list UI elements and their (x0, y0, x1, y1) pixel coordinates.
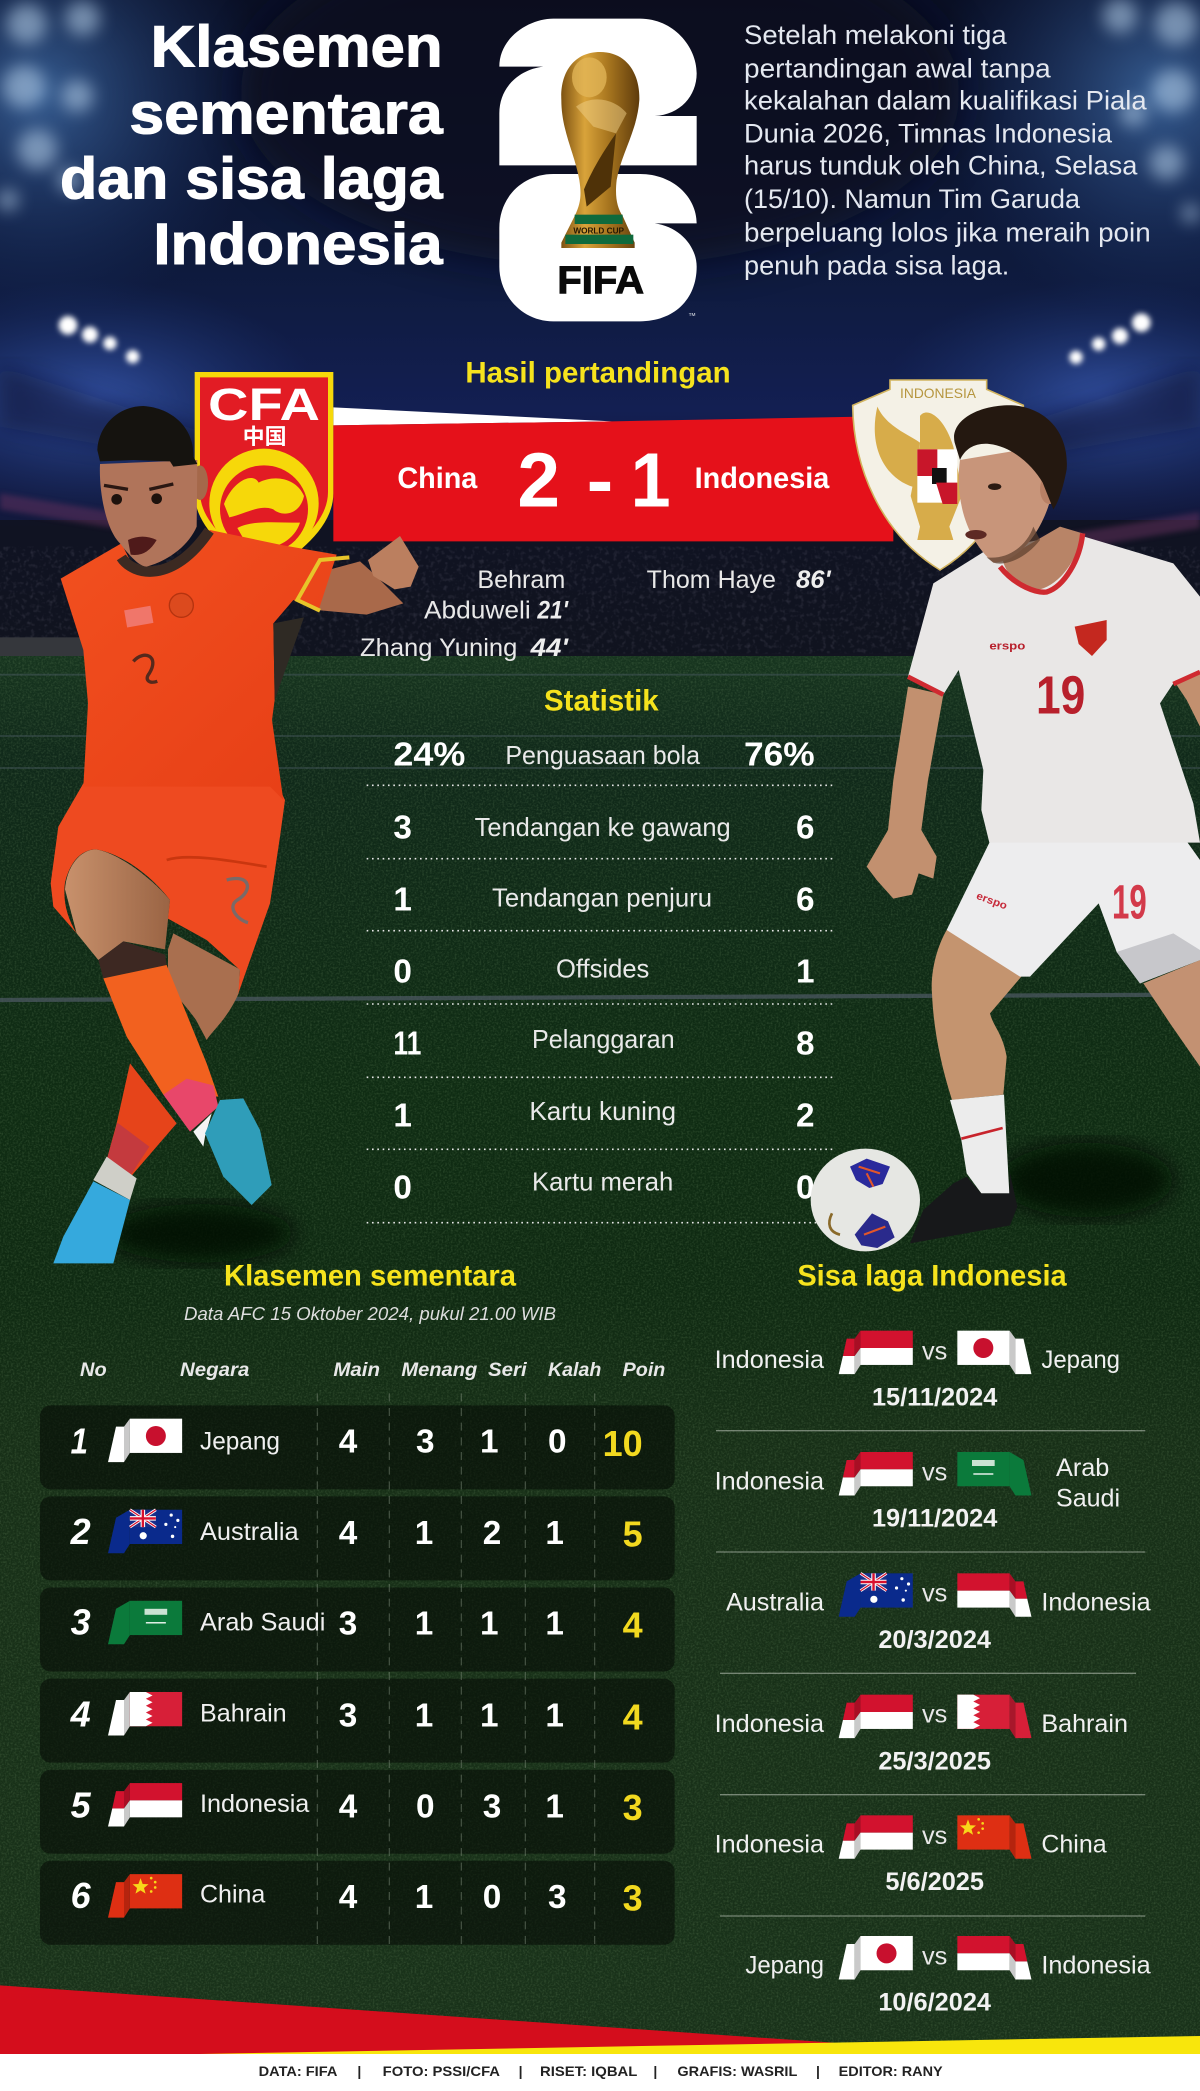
row: Arab Saudi: 3 (71, 1602, 91, 1643)
badge: CFA China: 中国 (243, 425, 287, 449)
row: Bahrain: Bahrain (200, 1699, 287, 1727)
stat: corners: 1 (393, 882, 412, 919)
heading: standings: Klasemen sementara (224, 1259, 517, 1292)
stat: fouls: 11 (393, 1026, 421, 1063)
stat: yellow cards: Kartu kuning (529, 1096, 676, 1126)
match: Australia vs Indonesia: Indonesia (1041, 1589, 1152, 1617)
stat: fouls (393, 1024, 815, 1063)
white jersey (908, 533, 1200, 843)
match: Indonesia vs Bahrain: vs (922, 1701, 947, 1729)
footer: credits: EDITOR: RANY (839, 2063, 943, 2079)
row: Indonesia: 5 (71, 1784, 92, 1825)
match: Indonesia vs Arab Saudi: 19/11/2024 (872, 1505, 997, 1533)
match: Jepang vs Indonesia (745, 1936, 1152, 2017)
stat: offsides: 1 (796, 954, 815, 991)
row: Australia (70, 1510, 643, 1555)
title (60, 15, 443, 277)
white shorts (947, 837, 1200, 983)
table header: Kalah (548, 1360, 601, 1381)
stat: shots on goal: 3 (393, 810, 412, 847)
match: Indonesia vs China (715, 1815, 1108, 1896)
background: night stadium sky (0, 0, 1200, 660)
row: China: 0 (483, 1879, 501, 1916)
row: Jepang: 0 (548, 1424, 567, 1461)
stat: shots on goal: Tendangan ke gawang (475, 812, 731, 842)
score: 1 (631, 438, 671, 524)
row: Arab Saudi (71, 1601, 643, 1645)
trophy (561, 52, 639, 248)
row: Bahrain: 4 (623, 1696, 643, 1737)
match: Indonesia vs Jepang: vs (922, 1337, 947, 1365)
score: 2 (517, 438, 560, 524)
heading: statistics: Statistik (544, 685, 659, 718)
footer: credits: | (653, 2063, 657, 2079)
hair (97, 406, 197, 467)
row: Australia: 4 (339, 1515, 358, 1552)
match: Australia vs Indonesia: vs (922, 1579, 947, 1607)
goal scorers: Thom Haye (647, 566, 776, 594)
match: Indonesia vs China: 5/6/2025 (885, 1868, 984, 1896)
teal boot (205, 1098, 272, 1205)
row: China: China (200, 1881, 266, 1909)
numeral 6 (499, 174, 697, 321)
row: China: 3 (548, 1879, 567, 1916)
row: China: 3 (623, 1878, 643, 1919)
footer: credits: | (816, 2063, 820, 2079)
jersey number: 19 (1036, 666, 1085, 725)
row: Arab Saudi: 4 (623, 1604, 643, 1645)
grey ankle (93, 1157, 137, 1200)
FIFA wordmark: FIFA (557, 259, 644, 302)
player: China footballer (51, 406, 419, 1263)
front thigh (65, 849, 170, 960)
row: Indonesia: 0 (416, 1788, 435, 1825)
match: Australia vs Indonesia: 20/3/2024 (878, 1626, 991, 1654)
blue boot (53, 1181, 130, 1263)
jersey details (124, 593, 248, 923)
row: Arab Saudi: 1 (480, 1606, 499, 1643)
match: Indonesia vs Jepang: 15/11/2024 (872, 1383, 997, 1411)
match: Indonesia vs Bahrain: 25/3/2025 (878, 1747, 991, 1775)
stat: yellow cards: 1 (393, 1098, 412, 1135)
intro text: Dunia 2026, Timnas Indonesia (744, 119, 1112, 149)
stat: fouls: 8 (796, 1026, 815, 1063)
row: Indonesia: Indonesia (200, 1790, 310, 1818)
match: Indonesia vs Arab Saudi: Saudi (1056, 1485, 1120, 1513)
stat: offsides: Offsides (556, 953, 649, 983)
row: Australia: Australia (200, 1518, 300, 1546)
numeral 2 (499, 19, 697, 165)
score: - (587, 438, 613, 524)
row: China (71, 1874, 643, 1919)
intro text (744, 20, 1151, 281)
match: Jepang vs Indonesia: 10/6/2024 (878, 1989, 991, 2017)
pink toe (163, 1079, 218, 1132)
stat: fouls: Pelanggaran (532, 1024, 675, 1054)
row: Bahrain: 4 (70, 1694, 91, 1735)
stat: corners: 6 (796, 882, 815, 919)
trademark: ™ (688, 312, 696, 321)
armband (297, 557, 349, 611)
stat: ball possession: 76% (744, 736, 815, 773)
row: Indonesia: 3 (483, 1788, 501, 1825)
team: China: China (397, 462, 478, 495)
goal scorers: 21' (536, 597, 569, 625)
collar (121, 531, 209, 571)
table header (80, 1360, 665, 1381)
footer: credits: | (357, 2063, 361, 2079)
footer: credits: FOTO: PSSI/CFA (383, 2063, 500, 2079)
badge: CFA China (195, 372, 333, 576)
neck (1003, 527, 1083, 589)
match: Indonesia vs China: Indonesia (715, 1831, 825, 1859)
goal scorers: Behram (477, 566, 565, 594)
stat: yellow cards: 2 (796, 1098, 815, 1135)
match: Indonesia vs Bahrain: Indonesia (715, 1710, 825, 1738)
row: China: 1 (415, 1879, 433, 1916)
ear (1040, 475, 1059, 504)
heading: remaining matches: Sisa laga Indonesia (797, 1259, 1067, 1292)
row: Jepang: 1 (71, 1420, 88, 1461)
table header: No (80, 1360, 107, 1381)
black boot (910, 1173, 1017, 1243)
trophy: WORLD CUP (573, 226, 625, 235)
goal scorers: 86' (796, 566, 832, 594)
white ankle (193, 1113, 212, 1147)
stat: ball possession: Penguasaan bola (505, 740, 701, 770)
stat: shots on goal (393, 810, 815, 847)
intro text: (15/10). Namun Tim Garuda (744, 184, 1080, 214)
footer: credits (0, 2054, 1200, 2091)
row: Jepang: Jepang (200, 1427, 280, 1455)
footer: credits: GRAFIS: WASRIL (677, 2063, 798, 2079)
row: Indonesia: 1 (545, 1788, 564, 1825)
stat: offsides: 0 (393, 954, 412, 991)
eyes and mouth (965, 483, 1040, 564)
football (811, 1149, 920, 1251)
footer: red and yellow band (0, 1985, 1200, 2055)
subtitle: standings data source: Data AFC 15 Oktober 2024, pukul 21.00 WIB (184, 1303, 556, 1324)
jersey badge (1075, 620, 1107, 656)
row: Jepang: 10 (603, 1423, 643, 1464)
collar (1000, 533, 1083, 592)
table header: Seri (488, 1360, 527, 1381)
intro text: pertandingan awal tanpa (744, 53, 1051, 83)
right arm (1173, 673, 1200, 727)
match: Indonesia vs Jepang: Indonesia (715, 1346, 825, 1374)
match: Indonesia vs Bahrain (715, 1695, 1128, 1775)
score (517, 438, 671, 524)
match: Indonesia vs Jepang: Jepang (1041, 1346, 1120, 1374)
row: China: 6 (71, 1875, 92, 1916)
facial details (104, 484, 173, 555)
match: Jepang vs Indonesia: Indonesia (1041, 1951, 1152, 1979)
leg (932, 930, 1021, 1100)
logo: FIFA World Cup 26 emblem (499, 19, 697, 321)
match: Jepang vs Indonesia: vs (922, 1943, 947, 1971)
table header: Negara (180, 1360, 250, 1381)
badge: CFA China: CFA (208, 379, 320, 430)
match: Jepang vs Indonesia: Jepang (745, 1951, 824, 1979)
row: Arab Saudi: 3 (339, 1606, 357, 1643)
row: Bahrain: 1 (415, 1698, 433, 1735)
table header: Poin (623, 1360, 665, 1381)
intro text: Setelah melakoni tiga (744, 20, 1007, 50)
row: Bahrain: 1 (545, 1698, 564, 1735)
back thigh (168, 933, 240, 1040)
match: Indonesia vs China: vs (922, 1822, 947, 1850)
intro text: kekalahan dalam kualifikasi Piala (744, 85, 1147, 115)
row: Indonesia: 3 (623, 1787, 643, 1828)
row: Bahrain: 1 (480, 1698, 499, 1735)
table header: Main (333, 1360, 380, 1381)
row: Jepang: 3 (416, 1424, 435, 1461)
stat: corners: Tendangan penjuru (492, 883, 712, 913)
row: Australia: 1 (415, 1515, 433, 1552)
match: Indonesia vs Arab Saudi (715, 1452, 1120, 1533)
goal scorers: Abduweli (424, 597, 531, 625)
standings table (40, 1360, 675, 1945)
row: Australia: 2 (70, 1511, 91, 1552)
stat: corners (393, 882, 815, 919)
short sponsor: erspo (975, 890, 1009, 912)
shorts (51, 770, 285, 993)
footer: credits: DATA: FIFA (259, 2063, 337, 2079)
row: Indonesia: 4 (339, 1788, 358, 1825)
hair (954, 405, 1067, 509)
match: Indonesia vs Bahrain: Bahrain (1041, 1710, 1128, 1738)
match: Australia vs Indonesia (726, 1573, 1152, 1654)
goal scorers: Zhang Yuning (360, 634, 517, 662)
row: Australia: 1 (545, 1515, 564, 1552)
statistics table (367, 736, 835, 1223)
stat: ball possession: 24% (393, 736, 465, 773)
arm (867, 687, 943, 899)
stat: offsides (393, 953, 815, 991)
remaining matches list (715, 1331, 1152, 2017)
title: Indonesia (153, 212, 443, 277)
arm (303, 561, 403, 615)
stat: ball possession (393, 736, 815, 773)
jersey (61, 530, 337, 800)
intro text: berpeluang lolos jika meraih poin (744, 217, 1151, 247)
goal scorers: 44' (530, 634, 569, 662)
row: Jepang: 1 (480, 1424, 499, 1461)
intro text: harus tunduk oleh China, Selasa (744, 151, 1138, 181)
orange sock (103, 965, 218, 1097)
stat: red cards: 0 (393, 1170, 412, 1207)
title: dan sisa laga (60, 147, 443, 212)
score banner (333, 407, 893, 541)
row: Bahrain: 3 (339, 1698, 357, 1735)
background: grass pitch (0, 656, 1200, 2091)
row: Arab Saudi: Arab Saudi (200, 1609, 325, 1637)
stat: red cards: 0 (796, 1170, 815, 1207)
face (100, 460, 197, 567)
goal scorers (360, 566, 832, 662)
sponsor: erspo (989, 640, 1026, 652)
title: Klasemen (151, 15, 443, 80)
white sock (950, 1095, 1009, 1193)
back sock (107, 1063, 177, 1181)
table header: Menang (401, 1360, 478, 1381)
row: Indonesia (71, 1783, 643, 1828)
match: Indonesia vs Jepang (715, 1331, 1120, 1411)
row: Bahrain (70, 1692, 643, 1737)
fist (368, 536, 419, 589)
heading: match result: Hasil pertandingan (465, 357, 731, 390)
stat: shots on goal: 6 (796, 810, 815, 847)
sock band (98, 941, 167, 978)
intro text: penuh pada sisa laga. (744, 251, 1009, 281)
stat: yellow cards (393, 1096, 815, 1135)
row: Arab Saudi: 1 (545, 1606, 564, 1643)
short number: 19 (1112, 877, 1147, 930)
stat: red cards: Kartu merah (532, 1167, 673, 1197)
row: Arab Saudi: 1 (415, 1606, 433, 1643)
row: Jepang (71, 1419, 643, 1464)
player: Indonesia footballer (867, 405, 1200, 1243)
match: Indonesia vs Arab Saudi: Arab (1056, 1454, 1109, 1482)
team: Indonesia: Indonesia (695, 462, 830, 495)
footer: credits: | (519, 2063, 523, 2079)
match: Indonesia vs Arab Saudi: vs (922, 1459, 947, 1487)
title: sementara (129, 81, 443, 146)
badge: Indonesia Garuda (853, 380, 1023, 570)
match: Indonesia vs Arab Saudi: Indonesia (715, 1467, 825, 1495)
row: Jepang: 4 (339, 1424, 358, 1461)
face (959, 447, 1053, 563)
ear (192, 465, 208, 500)
stat: red cards (393, 1167, 815, 1207)
far leg (1143, 960, 1200, 1067)
row: Australia: 5 (623, 1514, 643, 1555)
row: China: 4 (339, 1879, 358, 1916)
badge: Indonesia Garuda: INDONESIA (900, 385, 977, 401)
match: Indonesia vs China: China (1041, 1831, 1108, 1859)
footer: credits: RISET: IQBAL (540, 2063, 638, 2079)
match: Australia vs Indonesia: Australia (726, 1589, 825, 1617)
row: Australia: 2 (483, 1515, 501, 1552)
